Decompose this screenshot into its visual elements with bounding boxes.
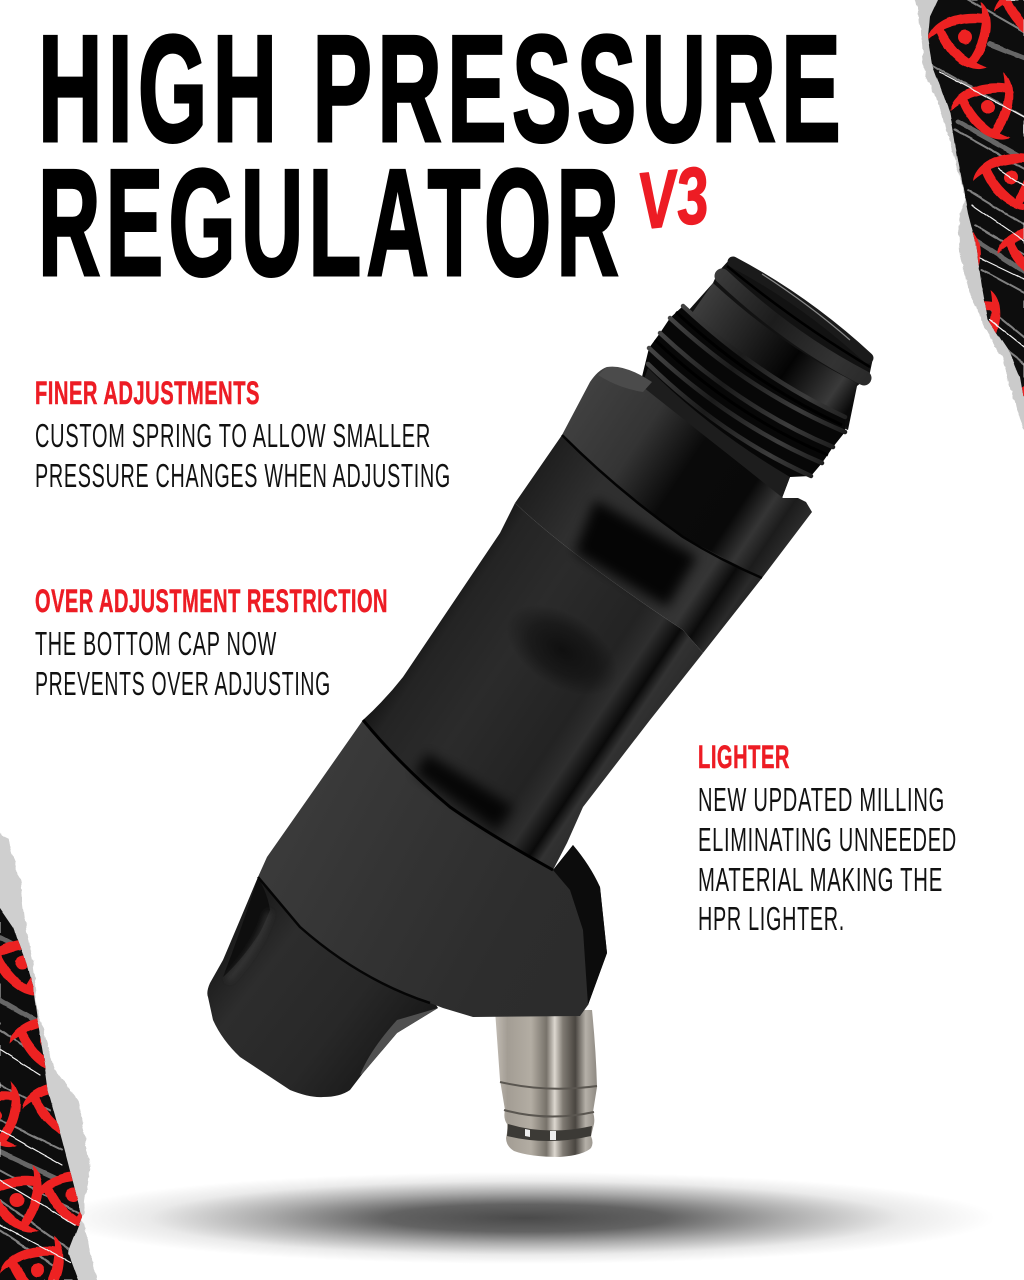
upper body lower band	[515, 435, 762, 653]
callout text line 2: PREVENTS OVER ADJUSTING	[35, 665, 331, 702]
callout heading: OVER ADJUSTMENT RESTRICTION	[35, 583, 388, 619]
product: regulator	[207, 258, 873, 1157]
bottom cap	[207, 877, 438, 1097]
callout text line 1: CUSTOM SPRING TO ALLOW SMALLER	[35, 417, 431, 454]
callout text line 1: THE BOTTOM CAP NOW	[35, 625, 277, 662]
callout text line 2: PRESSURE CHANGES WHEN ADJUSTING	[35, 457, 451, 494]
torn paper pattern: top right	[928, 0, 1024, 396]
floor shadow	[55, 1172, 995, 1264]
upper body top band	[562, 367, 812, 578]
version mark: V3	[633, 150, 712, 246]
threads	[640, 306, 845, 498]
torn paper pattern: bottom left	[0, 908, 82, 1280]
torn paper edge: bottom left	[0, 828, 98, 1280]
lower block with wing	[258, 720, 607, 1017]
neck and seal	[680, 258, 873, 430]
callout: over adjustment restriction	[35, 583, 388, 702]
metal fitting	[495, 1010, 597, 1157]
torn paper: bottom left	[0, 832, 97, 1280]
middle body	[363, 503, 703, 870]
callout heading: FINER ADJUSTMENTS	[35, 375, 260, 411]
title	[38, 4, 846, 308]
callout heading: LIGHTER	[698, 739, 790, 775]
callout: finer adjustments	[35, 375, 451, 494]
torn paper edge: top right	[915, 0, 1024, 445]
callout: lighter	[698, 739, 957, 937]
torn paper: top right	[915, 0, 1024, 445]
callout text line 4: HPR LIGHTER.	[698, 900, 845, 937]
